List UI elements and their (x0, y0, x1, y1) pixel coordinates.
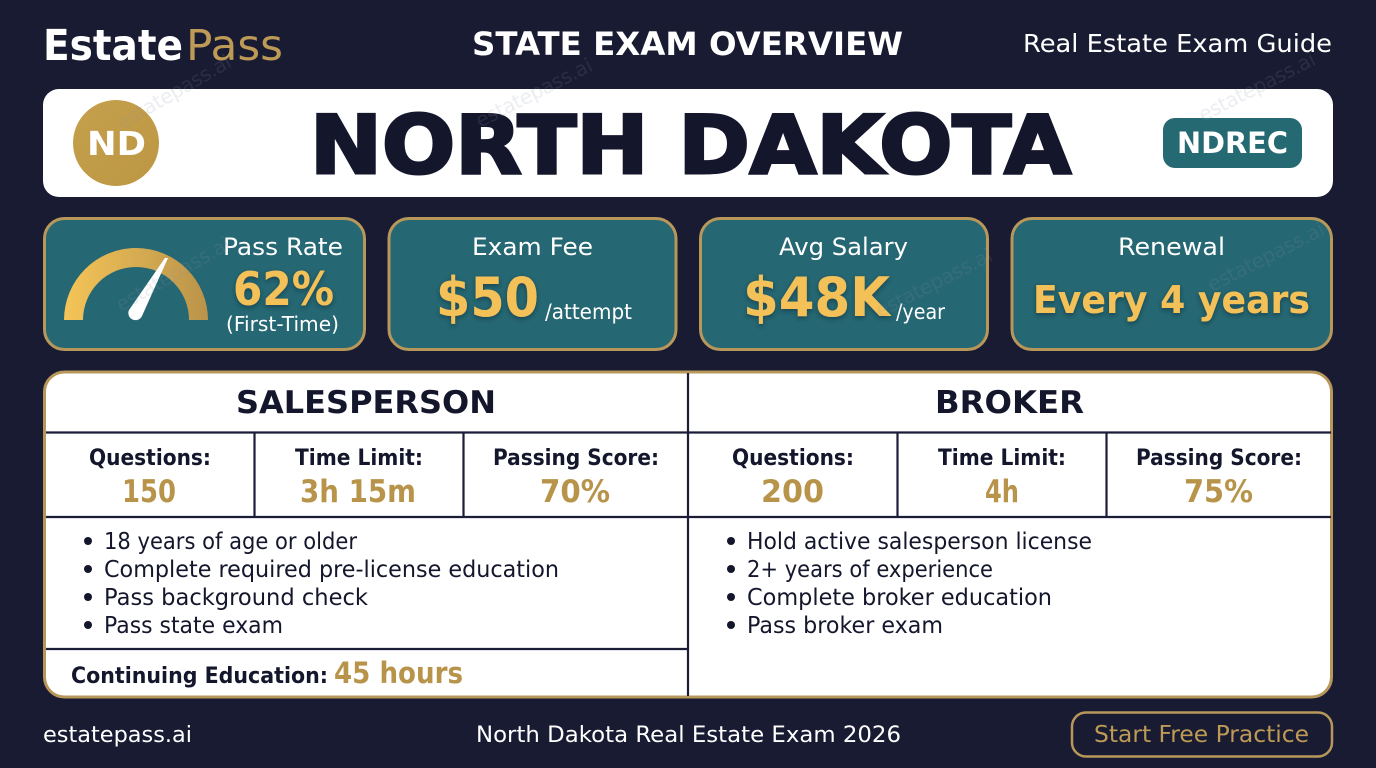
watermarks: estatepass.ai (1203, 217, 1328, 296)
requirements list: Pass background check (104, 585, 369, 611)
icon: gauge (64, 248, 208, 320)
commission badge: NDREC (1163, 118, 1302, 168)
state banner (43, 89, 1333, 197)
watermarks: estatepass.ai (871, 243, 996, 322)
stat: passing score: 75% (1184, 474, 1253, 510)
stat: questions (89, 446, 211, 510)
stat: time limit (938, 446, 1066, 510)
stat: questions: Questions: (89, 446, 211, 471)
value: Every 4 years (1033, 278, 1310, 322)
heading: BROKER (935, 385, 1084, 421)
header: title: STATE EXAM OVERVIEW (472, 25, 903, 63)
state name: NORTH DAKOTA (310, 99, 1071, 192)
header: logo (43, 21, 283, 71)
note: (First-Time) (226, 312, 339, 336)
footer: website: estatepass.ai (43, 723, 192, 748)
stat: passing score (493, 446, 659, 510)
footer: call to action button (1072, 712, 1332, 756)
state badge: ND (73, 100, 159, 186)
stat: time limit (295, 446, 423, 510)
requirements list: 2+ years of experience (747, 557, 993, 583)
stat: time limit: Time Limit: (295, 446, 423, 471)
label: Renewal (1118, 233, 1225, 261)
watermarks (112, 47, 1328, 322)
requirements list: Complete broker education (747, 585, 1052, 611)
label: Pass Rate (223, 233, 343, 261)
stat: time limit: Time Limit: (938, 446, 1066, 471)
footer: call to action button: Start Free Practice (1094, 722, 1309, 748)
panel: license comparison table (44, 372, 1332, 697)
footer: caption: North Dakota Real Estate Exam 2026 (476, 723, 901, 748)
stat: passing score (1136, 446, 1302, 510)
continuing education: Continuing Education: (71, 664, 328, 689)
watermarks: estatepass.ai (112, 50, 235, 134)
card: renewal (1012, 218, 1332, 350)
header: logo: Estate (43, 21, 183, 71)
unit: /year (896, 300, 945, 324)
stat: passing score: 70% (540, 474, 610, 510)
commission badge: NDREC: NDREC (1177, 126, 1288, 160)
continuing education: 45 hours (334, 656, 463, 690)
unit: /attempt (545, 300, 632, 324)
label: Exam Fee (472, 233, 593, 261)
column: salesperson (71, 385, 659, 690)
stat: passing score: Passing Score: (493, 446, 659, 471)
value: 62% (233, 262, 334, 316)
label: Avg Salary (779, 233, 908, 261)
requirements list: Hold active salesperson license (747, 529, 1092, 555)
value: $50 (436, 266, 539, 329)
heading: SALESPERSON (236, 385, 496, 421)
column: broker (727, 385, 1302, 639)
stat: questions (732, 446, 854, 510)
card: average salary (700, 218, 988, 350)
requirements list (727, 529, 1092, 639)
watermarks: estatepass.ai (1194, 47, 1319, 126)
requirements list: Pass state exam (104, 613, 283, 639)
watermarks: estatepass.ai (471, 53, 596, 132)
watermarks: estatepass.ai (112, 232, 234, 316)
header: logo: Pass (186, 21, 283, 71)
requirements list: Pass broker exam (747, 613, 943, 639)
card: exam fee (389, 218, 676, 350)
stat: questions: 200 (761, 474, 824, 510)
card: pass rate (44, 218, 364, 350)
stat: questions: 150 (122, 474, 176, 510)
value: $48K (743, 266, 892, 329)
header: subtitle: Real Estate Exam Guide (1023, 29, 1332, 58)
continuing education (71, 656, 463, 690)
stat: questions: Questions: (732, 446, 854, 471)
requirements list: Complete required pre-license education (104, 557, 559, 583)
stat: time limit: 4h (985, 474, 1019, 510)
requirements list: 18 years of age or older (104, 529, 357, 555)
stat: time limit: 3h 15m (300, 474, 416, 510)
state badge: ND: ND (87, 124, 146, 163)
requirements list (84, 529, 559, 639)
stat: passing score: Passing Score: (1136, 446, 1302, 471)
